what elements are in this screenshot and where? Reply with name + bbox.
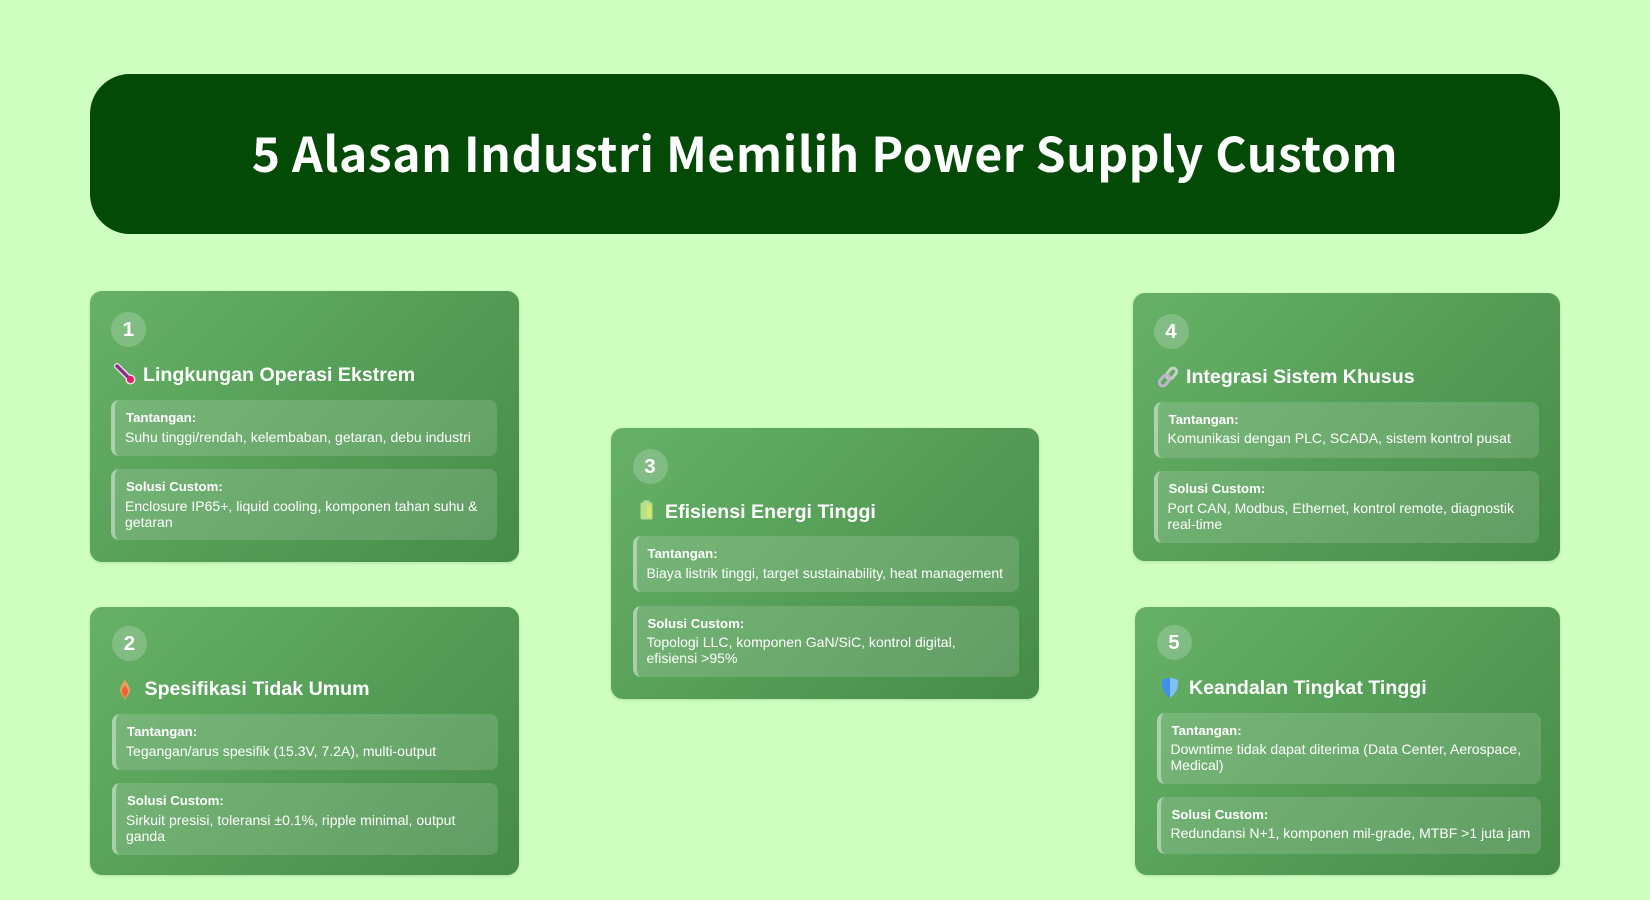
challenge box: Downtime tidak dapat diterima (Data Center, Aerospace,	[1170, 741, 1521, 757]
challenge box: Medical)	[1170, 757, 1224, 773]
panel: 3 Efisiensi Energi Tinggi	[611, 428, 1039, 699]
solution box	[1154, 471, 1539, 543]
solution box: Solusi Custom:	[648, 616, 744, 630]
number badge 4: 4	[1165, 320, 1177, 343]
icon: battery	[640, 500, 652, 520]
panel: 4 Integrasi Sistem Khusus	[1132, 293, 1560, 561]
solution box: Solusi Custom:	[1172, 806, 1268, 822]
challenge box	[111, 400, 497, 456]
solution box: Enclosure IP65+, liquid cooling, komponen tahan suhu &	[125, 498, 477, 514]
number badge 5	[1156, 625, 1192, 660]
challenge box: Tantangan:	[648, 546, 718, 561]
heading: Efisiensi Energi Tinggi	[665, 501, 876, 523]
challenge box: Tantangan:	[1168, 412, 1239, 426]
challenge box	[1156, 712, 1540, 784]
challenge box: Tegangan/arus spesifik (15.3V, 7.2A), multi-output	[126, 742, 436, 758]
icon: flame	[120, 678, 130, 700]
number badge 4	[1154, 314, 1188, 349]
solution box: Solusi Custom:	[127, 793, 224, 808]
panel: 1 Lingkungan Operasi Ekstrem	[90, 291, 519, 562]
challenge box: Tantangan:	[1172, 722, 1242, 738]
solution box: getaran	[125, 514, 173, 530]
solution box	[1156, 796, 1540, 854]
challenge box	[632, 536, 1018, 592]
solution box: Solusi Custom:	[126, 479, 223, 494]
heading: Keandalan Tingkat Tinggi	[1189, 677, 1427, 699]
challenge box: Tantangan:	[126, 410, 196, 425]
number badge 1: 1	[123, 318, 134, 341]
challenge box: Biaya listrik tinggi, target sustainability, heat management	[646, 564, 1003, 580]
solution box: ganda	[126, 828, 165, 844]
number badge 5: 5	[1168, 631, 1180, 654]
number badge 2	[112, 626, 147, 660]
title banner	[90, 74, 1560, 234]
icon: thermometer	[114, 363, 136, 384]
heading: Lingkungan Operasi Ekstrem	[143, 364, 415, 386]
panel: 2 Spesifikasi Tidak Umum	[90, 606, 519, 875]
solution box	[632, 606, 1018, 677]
challenge box	[1154, 402, 1539, 458]
number badge 3	[632, 448, 668, 484]
solution box: Solusi Custom:	[1168, 481, 1265, 496]
solution box	[112, 783, 498, 855]
heading: Spesifikasi Tidak Umum	[144, 678, 370, 700]
solution box: Topologi LLC, komponen GaN/SiC, kontrol digital,	[646, 634, 956, 650]
title: 5 Alasan Industri Memilih Power Supply Custom	[252, 116, 1398, 186]
challenge box: Komunikasi dengan PLC, SCADA, sistem kontrol pusat	[1168, 430, 1511, 446]
solution box: Sirkuit presisi, toleransi ±0.1%, ripple minimal, output	[126, 812, 455, 828]
heading: Integrasi Sistem Khusus	[1186, 366, 1415, 388]
icon: link	[1158, 366, 1178, 388]
solution box: Port CAN, Modbus, Ethernet, kontrol remote, diagnostik	[1168, 500, 1514, 516]
solution box: efisiensi >95%	[646, 650, 737, 666]
panel: 5 Keandalan Tingkat Tinggi	[1135, 606, 1560, 875]
solution box: Redundansi N+1, komponen mil-grade, MTBF >1 juta jam	[1170, 825, 1530, 841]
number badge 2: 2	[124, 632, 135, 654]
challenge box	[112, 714, 498, 770]
icon: shield	[1162, 678, 1178, 698]
solution box	[111, 469, 497, 540]
solution box: real-time	[1168, 516, 1222, 532]
challenge box: Tantangan:	[127, 724, 197, 739]
number badge 1	[111, 312, 146, 347]
number badge 3: 3	[644, 454, 656, 478]
challenge box: Suhu tinggi/rendah, kelembaban, getaran, debu industri	[125, 428, 471, 444]
